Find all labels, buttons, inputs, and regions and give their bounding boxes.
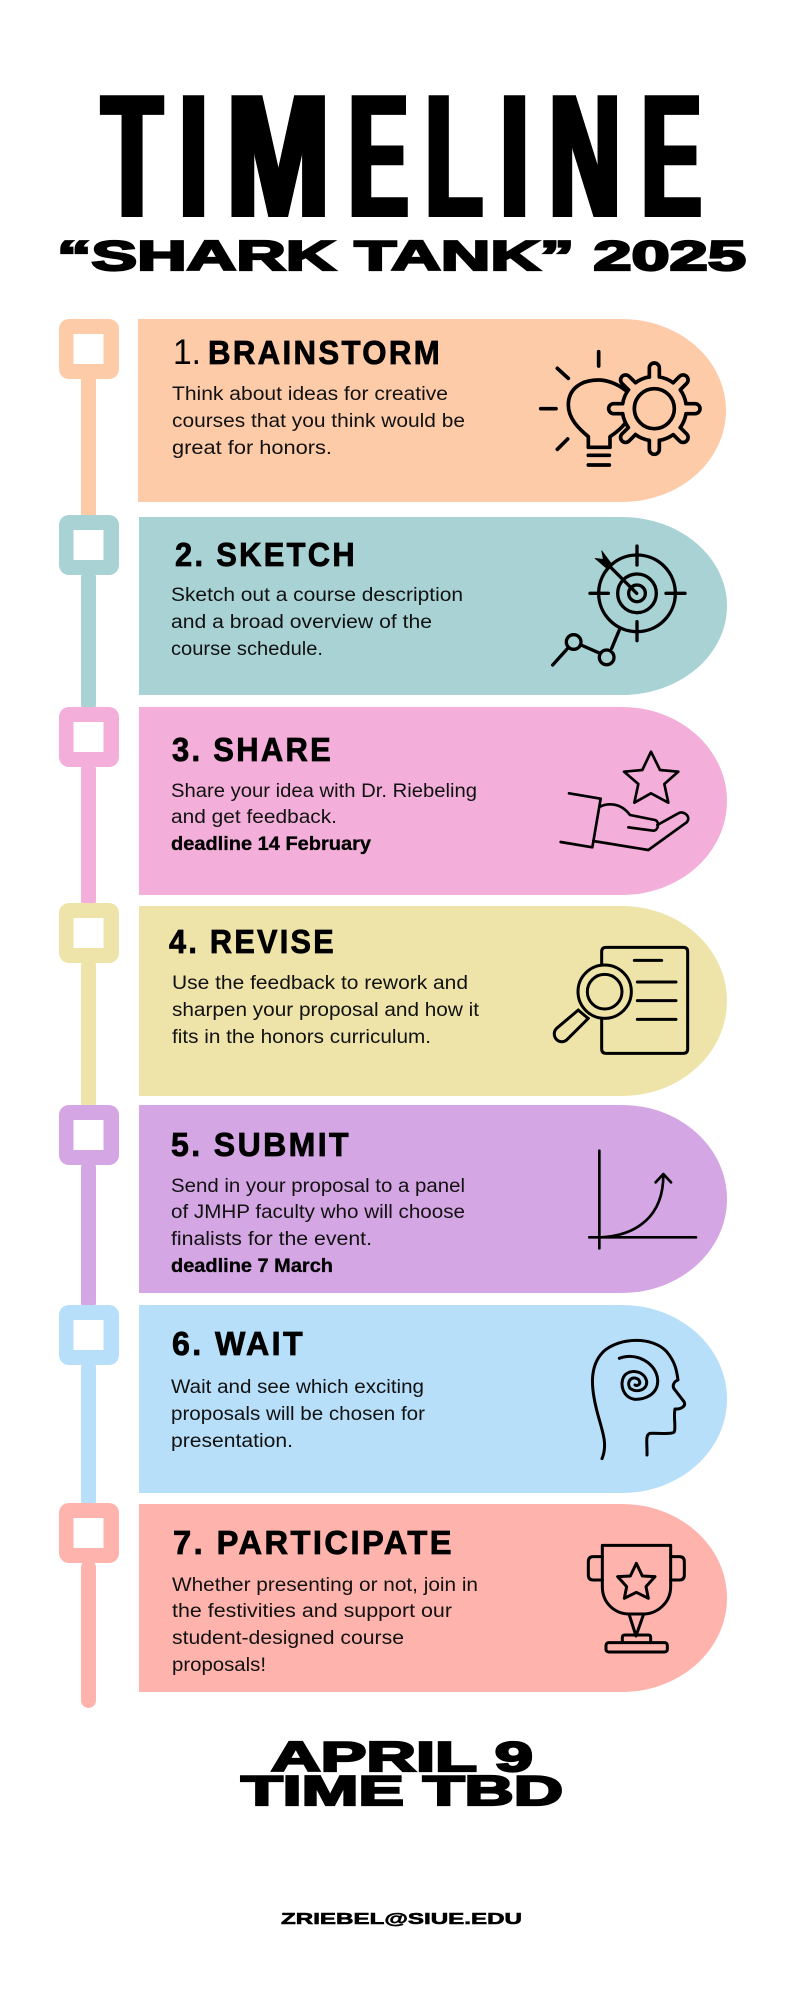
body text: presentation. [171,1431,293,1452]
title: N [550,57,620,255]
body text: the festivities and support our [172,1601,453,1622]
title: E [349,57,408,255]
subtitle: “SHARK TANK” 2025 [57,232,746,279]
body text: proposals! [172,1655,266,1676]
body text: of JMHP faculty who will choose [171,1202,465,1223]
text: E [642,57,701,255]
title: I [180,57,207,255]
body text [172,973,480,1048]
panel: 7 participate [139,1504,727,1692]
heading: 5 submit: 5. SUBMIT [171,1127,351,1164]
body text: Use the feedback to rework and [172,973,468,994]
body text [172,384,465,459]
title: T [102,57,162,255]
heading: 1 brainstorm: BRAINSTORM [208,335,442,372]
body text: fits in the honors curriculum. [172,1027,431,1048]
icon: lightbulb and gear [541,352,700,465]
body text: courses that you think would be [172,411,465,432]
panel: 5 submit [139,1105,727,1293]
body text: Whether presenting or not, join in [172,1575,478,1596]
body text: sharpen your proposal and how it [172,1000,480,1021]
body text: deadline 14 February [171,834,371,855]
icon: trophy with star [588,1545,684,1652]
timeline node 6 [59,1305,119,1365]
body text [171,1176,465,1277]
panel: 6 wait [139,1305,727,1493]
icon: head with spiral [592,1340,685,1459]
icon: target with arrow and chart line [553,546,685,665]
title: M [227,57,330,255]
timeline node 2 [59,515,119,575]
heading: 7 participate: 7. PARTICIPATE [173,1525,454,1562]
heading: 4 revise: 4. REVISE [169,924,336,961]
body text: Wait and see which exciting [171,1377,424,1398]
event date: APRIL 9 [271,1733,533,1780]
icon: hand holding star [561,752,688,850]
body text [171,1377,426,1452]
body text: course schedule. [171,639,323,660]
body text [171,585,463,660]
timeline node 4 [59,903,119,963]
body text [172,1575,478,1676]
heading: 2 sketch: 2. SKETCH [175,537,357,574]
timeline stem segments [81,375,96,1708]
title: I [501,57,528,255]
panel: 4 revise [139,906,727,1096]
heading: 1 brainstorm: 1. [173,333,201,372]
event date [241,1733,563,1814]
body text: student-designed course [172,1628,404,1649]
body text: finalists for the event. [171,1229,372,1250]
body text: Send in your proposal to a panel [171,1176,465,1197]
body text [171,781,477,855]
panel: 2 sketch [139,517,727,695]
body text: deadline 7 March [171,1256,333,1277]
icon: growth curve chart [589,1151,696,1248]
timeline node 3 [59,707,119,767]
timeline node 1 [59,319,119,379]
panel: 1 brainstorm [138,319,726,502]
body text: great for honors. [172,438,332,459]
body text: and get feedback. [171,807,337,828]
icon: magnifier over document [554,947,688,1053]
timeline node 7 [59,1503,119,1563]
body text: proposals will be chosen for [171,1404,426,1425]
title: L [426,57,482,255]
heading: 3 share: 3. SHARE [172,732,333,769]
panel: 3 share [139,707,727,895]
timeline node 5 [59,1105,119,1165]
event date: TIME TBD [241,1767,563,1814]
body text: Share your idea with Dr. Riebeling [171,781,477,802]
body text: Think about ideas for creative [172,384,448,405]
heading: 6 wait: 6. WAIT [172,1326,305,1363]
contact email: ZRIEBEL@SIUE.EDU [281,1911,522,1928]
body text: and a broad overview of the [171,612,432,633]
body text: Sketch out a course description [171,585,463,606]
